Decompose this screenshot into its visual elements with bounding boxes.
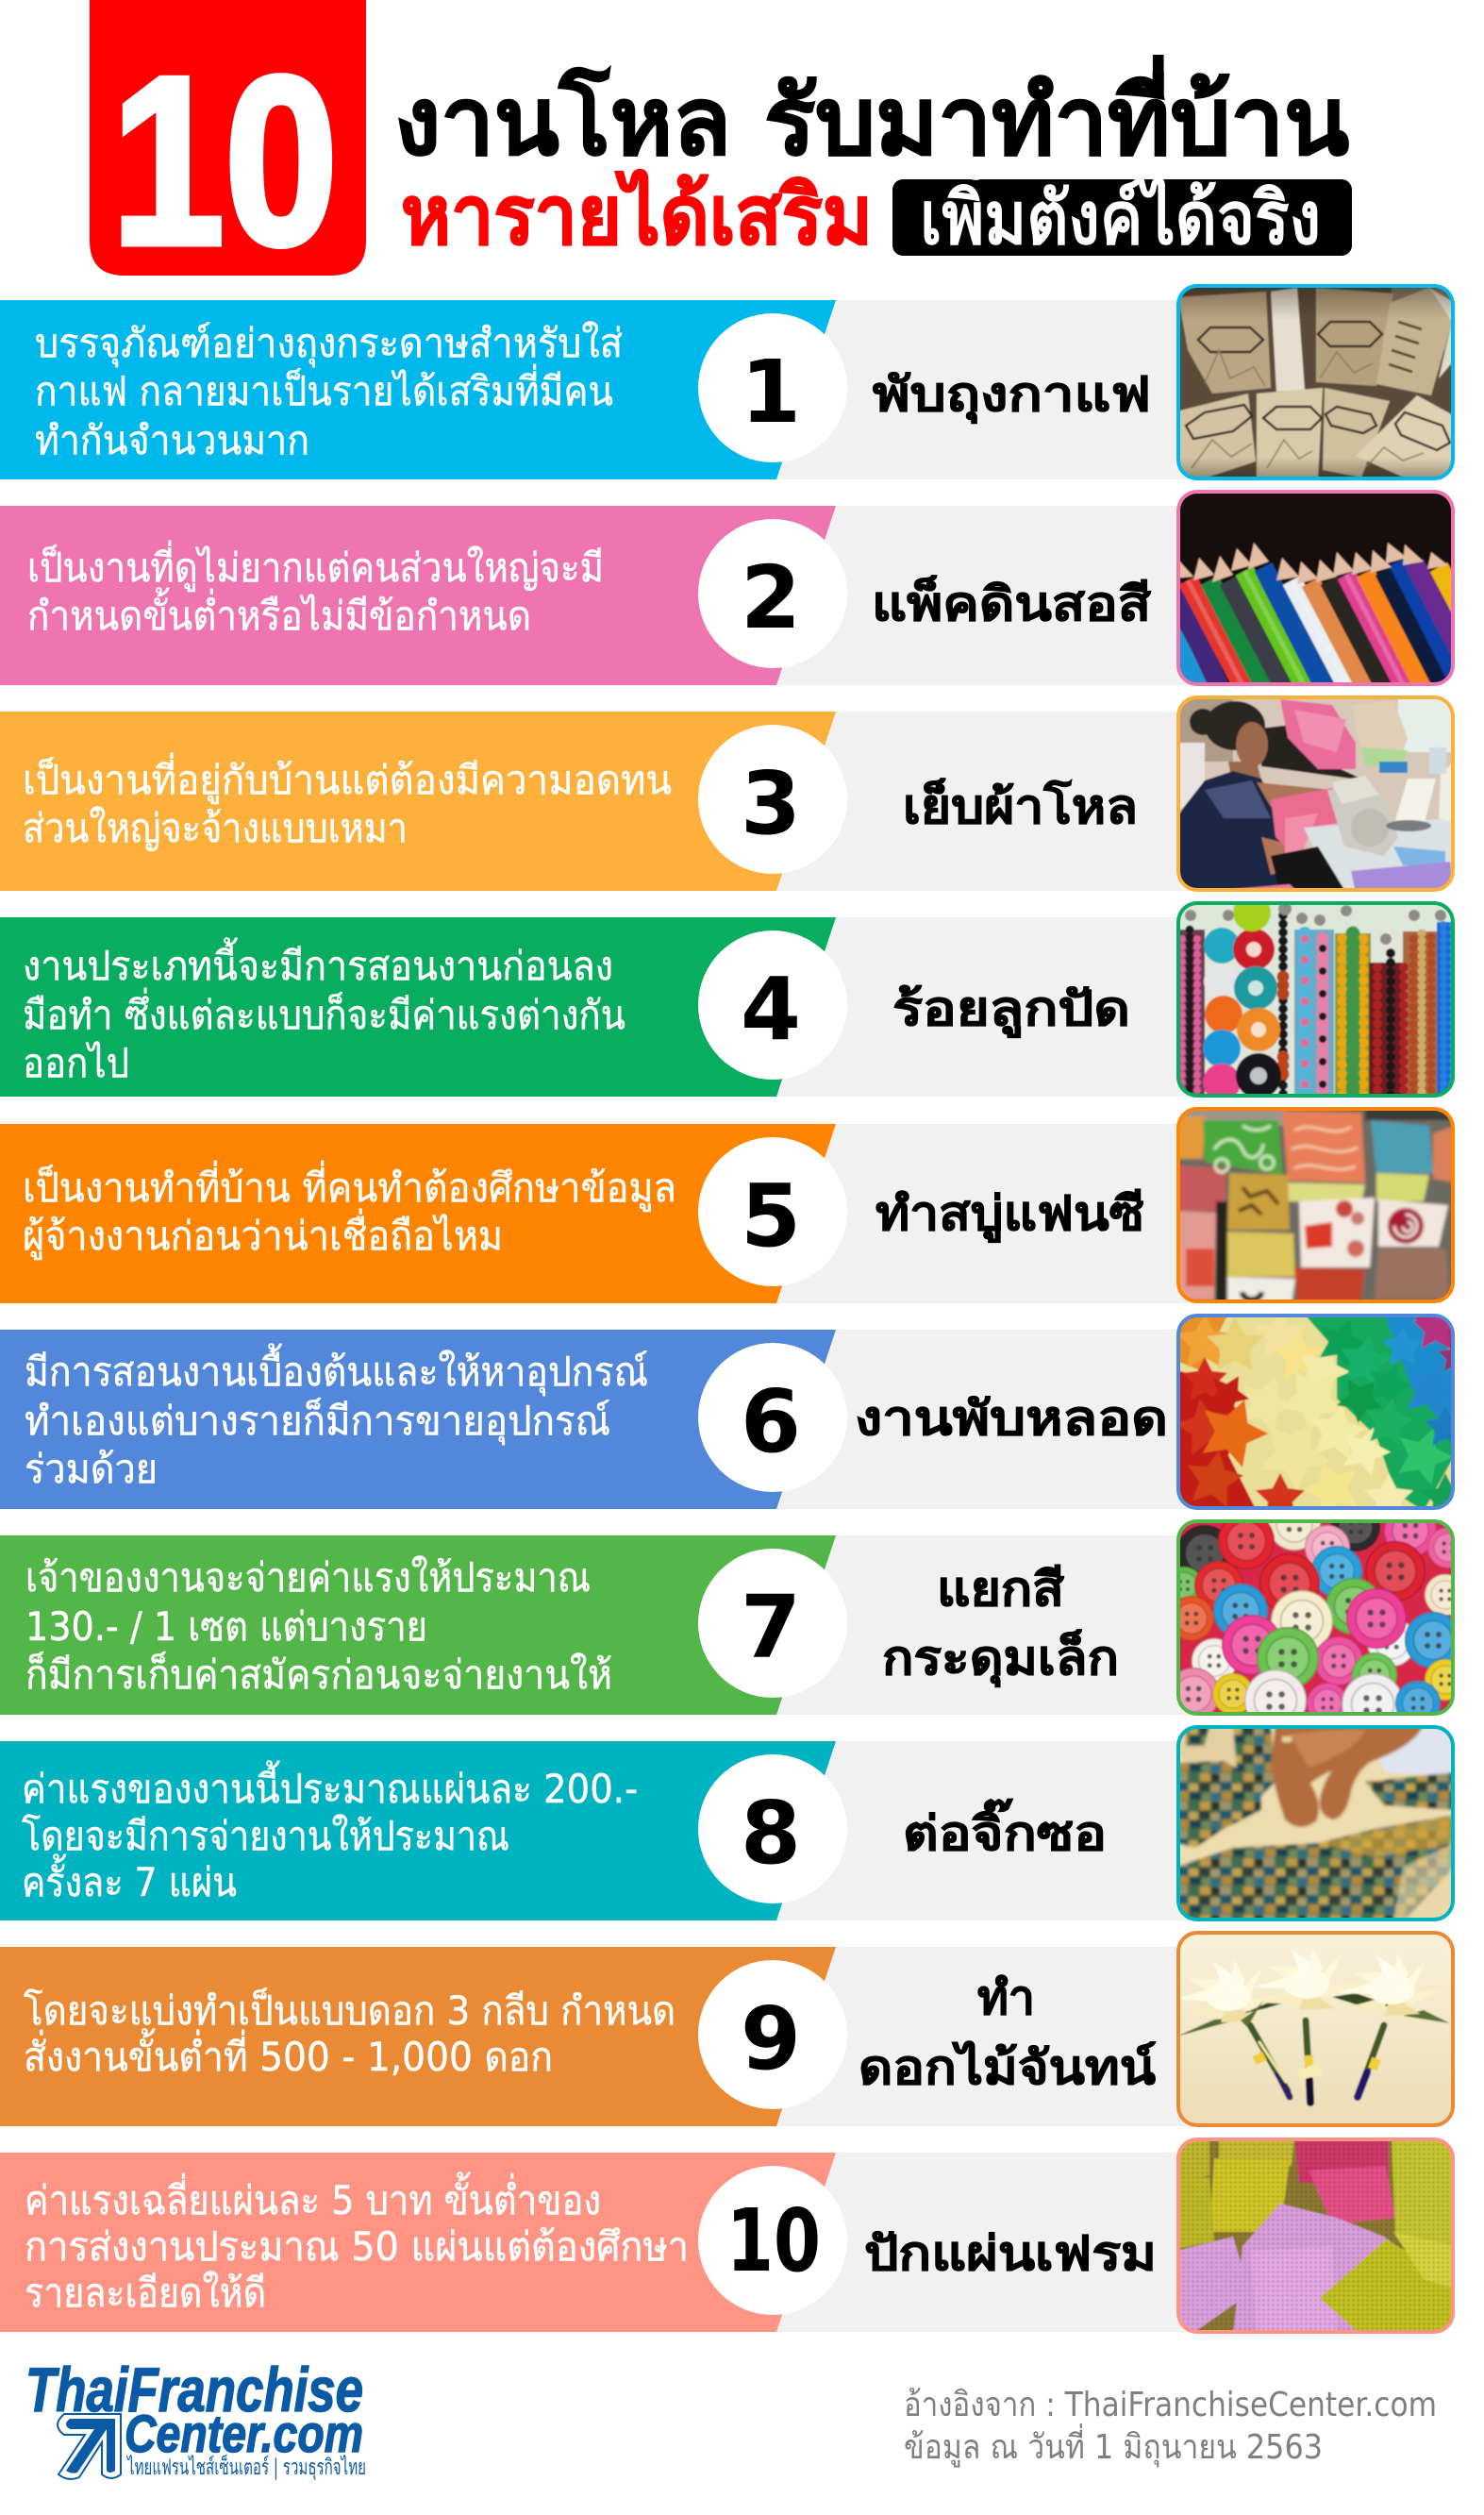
- job title: แยกสี: [937, 1562, 1065, 1617]
- grey band: [755, 1330, 1189, 1509]
- number badge 6: 6: [741, 1371, 801, 1472]
- number badge 4: 4: [741, 959, 801, 1060]
- colour band: [0, 1741, 836, 1920]
- badge: big number 10: 10: [111, 26, 338, 294]
- colour band: [0, 1330, 836, 1509]
- description: สั่งงานขั้นต่ำที่ 500 - 1,000 ดอก: [24, 2028, 553, 2080]
- number badge 5: [698, 1137, 847, 1286]
- number badge 3: [698, 725, 847, 874]
- photo: jigsaw puzzle: [1176, 1725, 1455, 1922]
- description: [23, 1161, 676, 1260]
- description: [23, 753, 672, 851]
- number badge 8: 8: [741, 1783, 801, 1884]
- number badge 2: 2: [741, 547, 801, 648]
- colour band: [0, 506, 836, 685]
- description: ทำเองแต่บางรายก็มีการขายอุปกรณ์: [25, 1398, 610, 1446]
- description: ร่วมด้วย: [25, 1446, 158, 1492]
- description: กาแฟ กลายมาเป็นรายได้เสริมที่มีคน: [35, 364, 613, 414]
- description: ส่วนใหญ่จะจ้างแบบเหมา: [23, 805, 408, 851]
- description: บรรจุภัณฑ์อย่างถุงกระดาษสำหรับใส่: [35, 320, 623, 368]
- description: 130.- / 1 เซต แต่บางราย: [25, 1603, 427, 1650]
- number badge 1: [698, 313, 847, 462]
- panel: row 4: [0, 894, 1455, 1101]
- colour band: [0, 917, 836, 1097]
- photo: coffee paper bags: [1176, 284, 1455, 481]
- number badge 1: 1: [741, 342, 801, 443]
- photo: coloured pencils: [1176, 490, 1455, 686]
- photo: colourful buttons: [1176, 1519, 1455, 1716]
- description: เจ้าของงานจะจ่ายค่าแรงให้ประมาณ: [25, 1554, 591, 1601]
- grey band: [755, 1124, 1189, 1303]
- panel: row 2: [0, 490, 1455, 686]
- number badge 7: 7: [741, 1577, 801, 1678]
- grey band: [755, 1741, 1189, 1920]
- number badge 8: [698, 1754, 847, 1903]
- job title: กระดุมเล็ก: [882, 1629, 1119, 1687]
- description: ทำกันจำนวนมาก: [35, 417, 309, 463]
- number badge 2: [698, 519, 847, 668]
- description: ค่าแรงเฉลี่ยแผ่นละ 5 บาท ขั้นต่ำของ: [25, 2171, 601, 2223]
- photo: fancy soaps: [1176, 1107, 1455, 1304]
- grey band: [755, 917, 1189, 1097]
- grey band: [755, 1947, 1189, 2126]
- description: โดยจะแบ่งทำเป็นแบบดอก 3 กลีบ กำหนด: [24, 1987, 675, 2034]
- description: [27, 541, 604, 639]
- job title: [882, 1562, 1119, 1687]
- panel: row 7: [0, 1519, 1455, 1716]
- grey band: [755, 712, 1189, 891]
- number badge 10: 10: [726, 2190, 821, 2291]
- colour band: [0, 2153, 836, 2332]
- job title: งานพับหลอด: [855, 1391, 1168, 1446]
- description: ออกไป: [23, 1040, 129, 1086]
- description: [25, 1554, 612, 1698]
- description: [25, 1343, 648, 1492]
- colour band: [0, 300, 836, 479]
- number badge 4: [698, 931, 847, 1080]
- number badge 7: [698, 1549, 847, 1698]
- description: เป็นงานทำที่บ้าน ที่คนทำต้องศึกษาข้อมูล: [23, 1161, 676, 1212]
- photo: plastic canvas sheets: [1176, 2138, 1455, 2335]
- number badge 10: [698, 2166, 847, 2315]
- job title: ดอกไม้จันทน์: [859, 2040, 1157, 2095]
- job title: ปักแผ่นเฟรม: [864, 2226, 1157, 2281]
- panel: row 10: [0, 2138, 1455, 2335]
- colour band: [0, 1535, 836, 1715]
- colour band: [0, 1947, 836, 2126]
- panel: row 6: [0, 1314, 1455, 1510]
- description: โดยจะมีการจ่ายงานให้ประมาณ: [22, 1813, 509, 1859]
- grey band: [755, 1535, 1189, 1715]
- source note: [904, 2386, 1437, 2468]
- number badge 9: 9: [741, 1988, 801, 2089]
- grey band: [755, 300, 1189, 479]
- description: มีการสอนงานเบื้องต้นและให้หาอุปกรณ์: [25, 1343, 648, 1397]
- description: ก็มีการเก็บค่าสมัครก่อนจะจ่ายงานให้: [25, 1652, 612, 1698]
- description: [24, 1987, 675, 2080]
- description: ครั้งละ 7 แผ่น: [22, 1853, 237, 1905]
- colour band: [0, 1124, 836, 1303]
- description: งานประเภทนี้จะมีการสอนงานก่อนลง: [23, 937, 613, 989]
- description: เป็นงานที่อยู่กับบ้านแต่ต้องมีความอดทน: [23, 753, 672, 804]
- description: [35, 320, 623, 463]
- description: การส่งงานประมาณ 50 แผ่นแต่ต้องศึกษา: [25, 2223, 689, 2270]
- panel: row 5: [0, 1107, 1455, 1304]
- title line 2 red: หารายได้เสริม: [401, 169, 873, 263]
- photo: woman sewing: [1176, 696, 1455, 893]
- description: [22, 1760, 638, 1905]
- panel: row 1: [0, 284, 1455, 481]
- job title: [859, 1970, 1157, 2095]
- number badge 3: 3: [741, 753, 801, 854]
- description: [25, 2171, 689, 2316]
- job title: ทำ: [977, 1970, 1035, 2025]
- number badge 5: 5: [741, 1165, 801, 1266]
- job title: ต่อจิ๊กซอ: [903, 1799, 1107, 1861]
- description: กำหนดขั้นต่ำหรือไม่มีข้อกำหนด: [27, 587, 531, 639]
- title line 1: งานโหล รับมาทำที่บ้าน: [394, 55, 1349, 176]
- description: ค่าแรงของงานนี้ประมาณแผ่นละ 200.-: [22, 1760, 638, 1812]
- description: [23, 937, 625, 1086]
- number badge 6: [698, 1343, 847, 1492]
- panel: row 9: [0, 1931, 1455, 2128]
- job title: ทำสบู่แฟนซี: [875, 1186, 1144, 1243]
- panel: row 8: [0, 1725, 1455, 1922]
- logo wordmark line 1: ThaiFranchise: [25, 2355, 363, 2424]
- description: ผู้จ้างงานก่อนว่าน่าเชื่อถือไหม: [23, 1209, 503, 1260]
- description: มือทำ ซึ่งแต่ละแบบก็จะมีค่าแรงต่างกัน: [23, 988, 625, 1038]
- grey band: [755, 2153, 1189, 2332]
- job title: พับถุงกาแฟ: [873, 367, 1151, 424]
- photo: bead strands: [1176, 894, 1455, 1101]
- logo tagline: ไทยแฟรนไชส์เซ็นเตอร์ | รวมธุรกิจไทย: [126, 2453, 366, 2480]
- panel: row 3: [0, 696, 1455, 893]
- grey band: [755, 506, 1189, 685]
- number badge 9: [698, 1960, 847, 2109]
- header: [90, 0, 1352, 294]
- job title: ร้อยลูกปัด: [892, 981, 1130, 1038]
- footer logo: ThaiFranchise Center: [25, 2355, 366, 2480]
- photo: folded plastic straw stars: [1176, 1314, 1455, 1510]
- icon: logo arrow: [58, 2414, 121, 2479]
- description: เป็นงานที่ดูไม่ยากแต่คนส่วนใหญ่จะมี: [27, 541, 604, 592]
- description: รายละเอียดให้ดี: [25, 2270, 266, 2316]
- photo: sandalwood flowers: [1174, 1931, 1455, 2128]
- job title: เย็บผ้าโหล: [903, 778, 1138, 834]
- colour band: [0, 712, 836, 891]
- logo wordmark line 2: Center.com: [125, 2404, 363, 2463]
- job title: แพ็คดินสอสี: [872, 575, 1152, 631]
- black tag: เพิ่มตังค์ได้จริง: [920, 167, 1321, 261]
- source note: ข้อมูล ณ วันที่ 1 มิถุนายน 2563: [904, 2423, 1323, 2468]
